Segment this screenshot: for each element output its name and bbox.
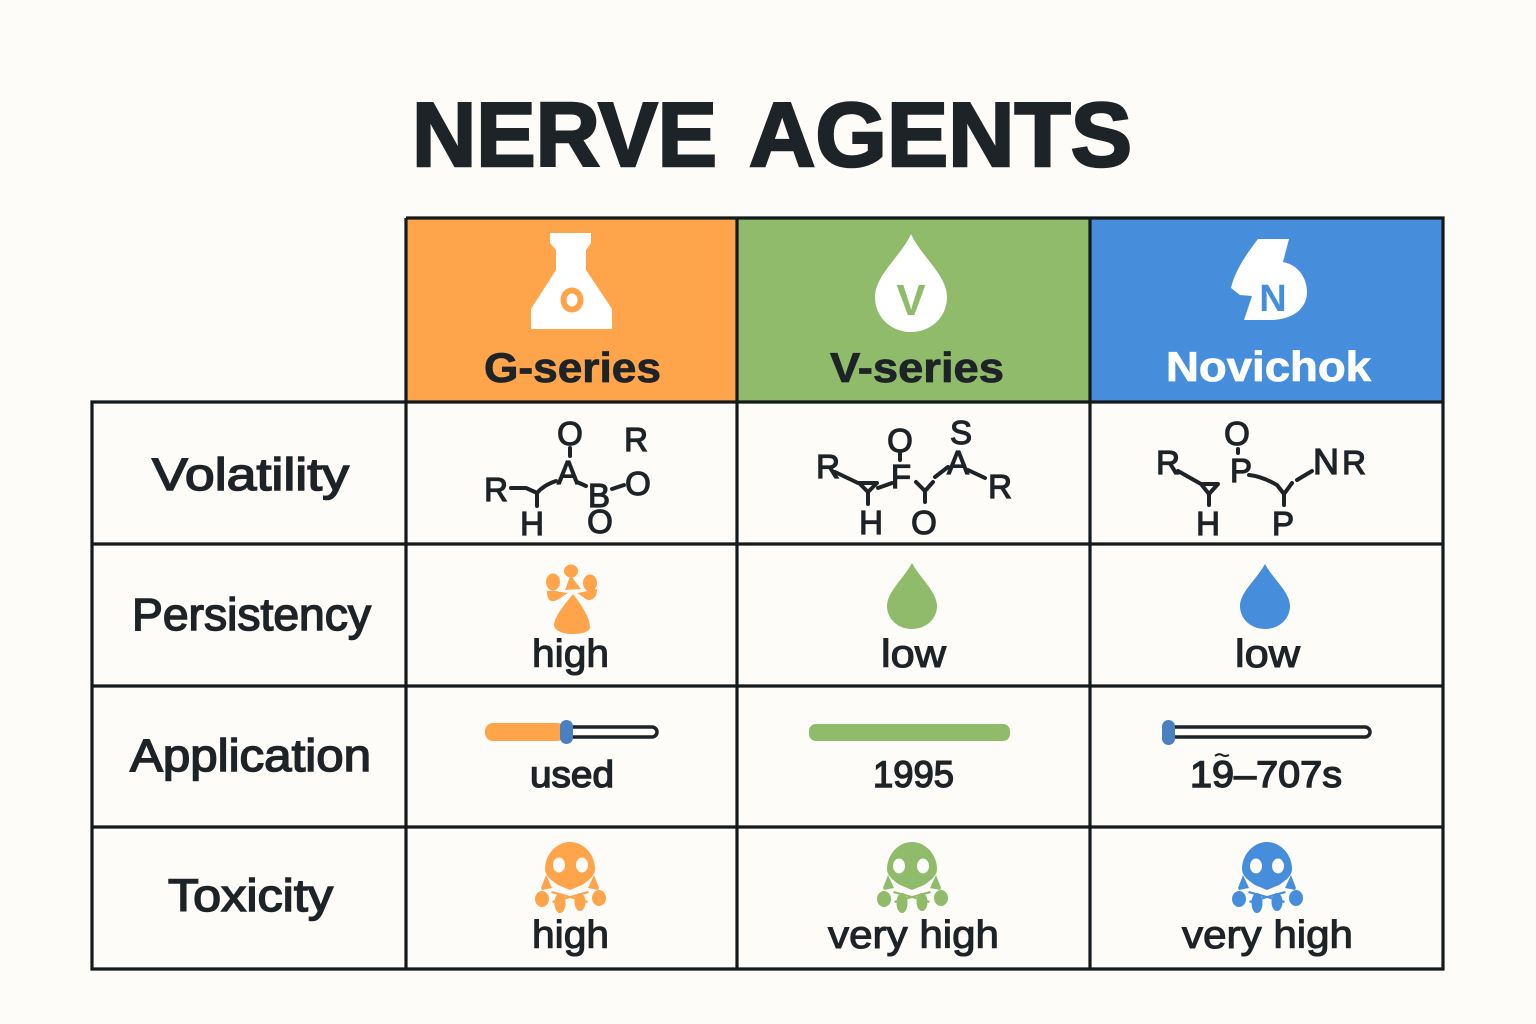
row label: Volatility: Volatility [152,449,350,500]
label: G-series: G-series [484,344,661,391]
icon: Novichok N mark: N [1259,278,1287,320]
molecule: G-series volatility: H [520,505,544,542]
value: Novichok persistency: low [1235,633,1301,676]
molecule: G-series volatility: R [624,421,648,458]
eyes: orange skull [553,858,588,872]
label: V-series: V-series [830,344,1004,391]
molecule: Novichok volatility: N [1313,441,1339,482]
molecule: G-series volatility: O [587,503,613,540]
molecule: Novichok volatility [1156,415,1366,542]
molecule: G-series volatility: B [588,477,610,514]
value: V-series persistency: low [881,633,947,676]
molecule: G-series volatility: R [484,471,508,508]
bar: V-series application [809,724,1010,741]
slider: Novichok application [1162,720,1370,745]
molecule: Novichok volatility: P [1230,452,1252,489]
molecule: V-series volatility: A [947,444,969,481]
molecule: G-series volatility: O [625,465,651,502]
molecule: V-series volatility [816,414,1012,541]
molecule: Novichok volatility: R [1342,444,1366,481]
molecule: V-series volatility: O [911,504,937,541]
icon: Novichok N mark [1231,239,1307,320]
molecule: V-series volatility: R [816,448,840,485]
value: G-series application: used [530,754,614,795]
value: Novichok toxicity: very high [1182,914,1353,957]
title: NERVE [412,85,717,186]
molecule: V-series volatility: F [891,458,911,495]
molecule: Novichok volatility: R [1156,444,1180,481]
icon: orange skull and crossbones [535,842,606,913]
icon: droplet with V: V [896,276,926,325]
eyes: green skull [893,858,929,874]
title: AGENTS [749,85,1132,186]
row label: Application: Application [130,730,371,781]
title [412,85,1132,186]
value: G-series persistency: high [532,633,609,676]
value: Novichok application: 19–707s [1190,754,1342,795]
row label: Persistency: Persistency [132,589,372,640]
icon: blue skull and crossbones [1232,842,1303,913]
molecule: V-series volatility: H [859,504,883,541]
value: V-series application: 1995 [873,754,954,795]
icon: green skull and crossbones [877,842,948,913]
column header: G-series [406,218,737,402]
column header: Novichok [1090,218,1443,402]
molecule: V-series volatility: R [988,468,1012,505]
slider: G-series application [485,720,657,744]
table grid [92,218,1443,969]
icon: orange splatter [546,564,597,634]
molecule: Novichok volatility: H [1196,505,1220,542]
molecule: Novichok volatility: P [1272,505,1294,542]
molecule: G-series volatility: A [557,454,579,491]
row label: Toxicity: Toxicity [168,870,334,921]
label: Novichok: Novichok [1166,343,1372,390]
icon: blue drop [1240,564,1290,629]
column header: V-series [737,218,1090,402]
icon: flask [531,233,612,329]
value: V-series toxicity: very high [828,914,999,957]
value: G-series toxicity: high [532,914,609,957]
molecule: G-series volatility [484,415,651,542]
molecule: Novichok volatility: O [1224,415,1250,452]
icon: green drop [887,563,937,629]
eyes: blue skull [1250,858,1284,874]
molecule: V-series volatility: S [950,414,972,451]
molecule: V-series volatility: O [887,422,913,459]
molecule: G-series volatility: O [557,415,583,452]
icon: droplet with V [875,234,947,332]
